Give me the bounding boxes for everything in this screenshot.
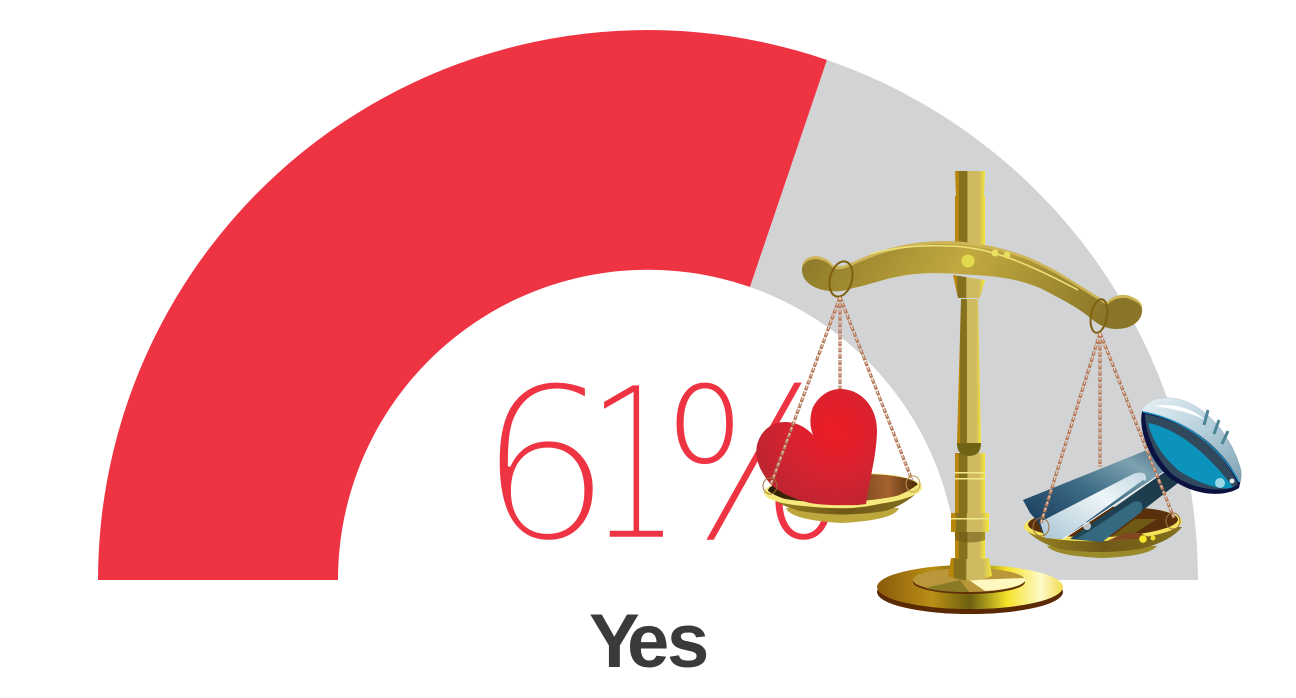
icon: football bbox=[1141, 398, 1241, 494]
icon: balance scale bbox=[756, 171, 1241, 614]
gauge chart bbox=[98, 30, 1198, 580]
right pan bbox=[1023, 504, 1183, 558]
scale beam bbox=[802, 241, 1142, 329]
label: Yes: Yes bbox=[589, 599, 709, 684]
icon: heart bbox=[756, 389, 877, 505]
left pan chains bbox=[763, 297, 920, 494]
left ring bbox=[826, 259, 856, 299]
percentage value: 6 bbox=[478, 342, 612, 588]
left pan front rim bbox=[766, 484, 920, 507]
right pan chains bbox=[1033, 333, 1180, 536]
percentage value: % bbox=[661, 343, 847, 589]
icon: trophy bbox=[1023, 450, 1178, 542]
percentage value bbox=[478, 342, 847, 589]
gauge segment: remainder bbox=[750, 60, 1198, 580]
right ring bbox=[1088, 298, 1110, 334]
left pan bbox=[763, 470, 923, 523]
percentage value: 1 bbox=[587, 342, 681, 588]
scale column bbox=[948, 171, 992, 580]
gauge segment: yes 61% bbox=[98, 30, 827, 580]
scale base bbox=[877, 565, 1063, 614]
